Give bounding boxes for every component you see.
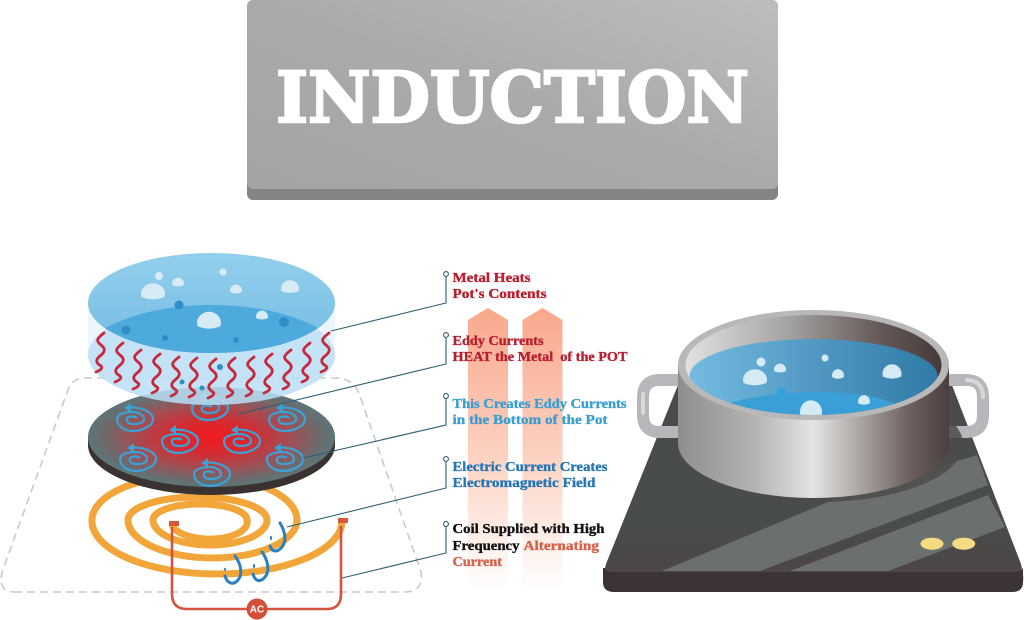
heat waves	[96, 333, 329, 398]
eddy current spirals	[117, 392, 305, 486]
label: creates eddy currents: This Creates Eddy Currents	[452, 397, 627, 412]
label: metal heats	[452, 271, 547, 302]
water cylinder	[88, 253, 335, 405]
label: eddy currents heat: HEAT the Metal of the POT	[452, 350, 628, 365]
deep water surface	[105, 305, 318, 353]
cooktop	[603, 380, 1023, 592]
pot	[678, 310, 949, 498]
induction coil	[92, 475, 348, 574]
label: creates eddy currents	[452, 397, 627, 428]
label: electromagnetic field	[452, 460, 608, 491]
pot shadow	[677, 386, 963, 502]
label: coil supplied: Current	[452, 555, 502, 570]
leader lines	[238, 272, 448, 578]
dark bubbles	[122, 300, 289, 390]
cooktop lower edge	[604, 568, 1023, 574]
upward heat arrows	[468, 308, 562, 590]
label: coil supplied: Alternating	[524, 539, 599, 554]
title text: INDUCTION	[276, 56, 749, 139]
pot handles	[643, 380, 983, 432]
pot bubbles	[743, 354, 902, 418]
pot water	[690, 339, 938, 418]
AC circuit wire	[172, 526, 341, 620]
label: coil supplied	[452, 522, 605, 570]
label: electromagnetic field: Electric Current Creates	[452, 460, 608, 475]
label: coil supplied: Frequency	[452, 539, 520, 554]
label: metal heats: Pot's Contents	[452, 287, 547, 302]
label: electromagnetic field: Electromagnetic Field	[452, 476, 596, 491]
label: metal heats: Metal Heats	[452, 271, 531, 286]
electromagnetic field loops	[225, 523, 285, 583]
coil terminals	[169, 518, 348, 526]
bubbles	[141, 268, 299, 329]
metal pot base plate	[88, 387, 335, 495]
title banner	[247, 0, 778, 200]
label: eddy currents heat	[452, 334, 628, 365]
cooktop light strips	[662, 455, 1005, 571]
AC source	[246, 598, 268, 620]
control buttons	[920, 538, 975, 550]
label: creates eddy currents: in the Bottom of the Pot	[452, 413, 608, 428]
dashed cooktop outline	[1, 378, 421, 592]
label: coil supplied: Coil Supplied with High	[452, 522, 605, 537]
AC source: AC	[250, 604, 264, 616]
label: eddy currents heat: Eddy Currents	[452, 334, 544, 349]
